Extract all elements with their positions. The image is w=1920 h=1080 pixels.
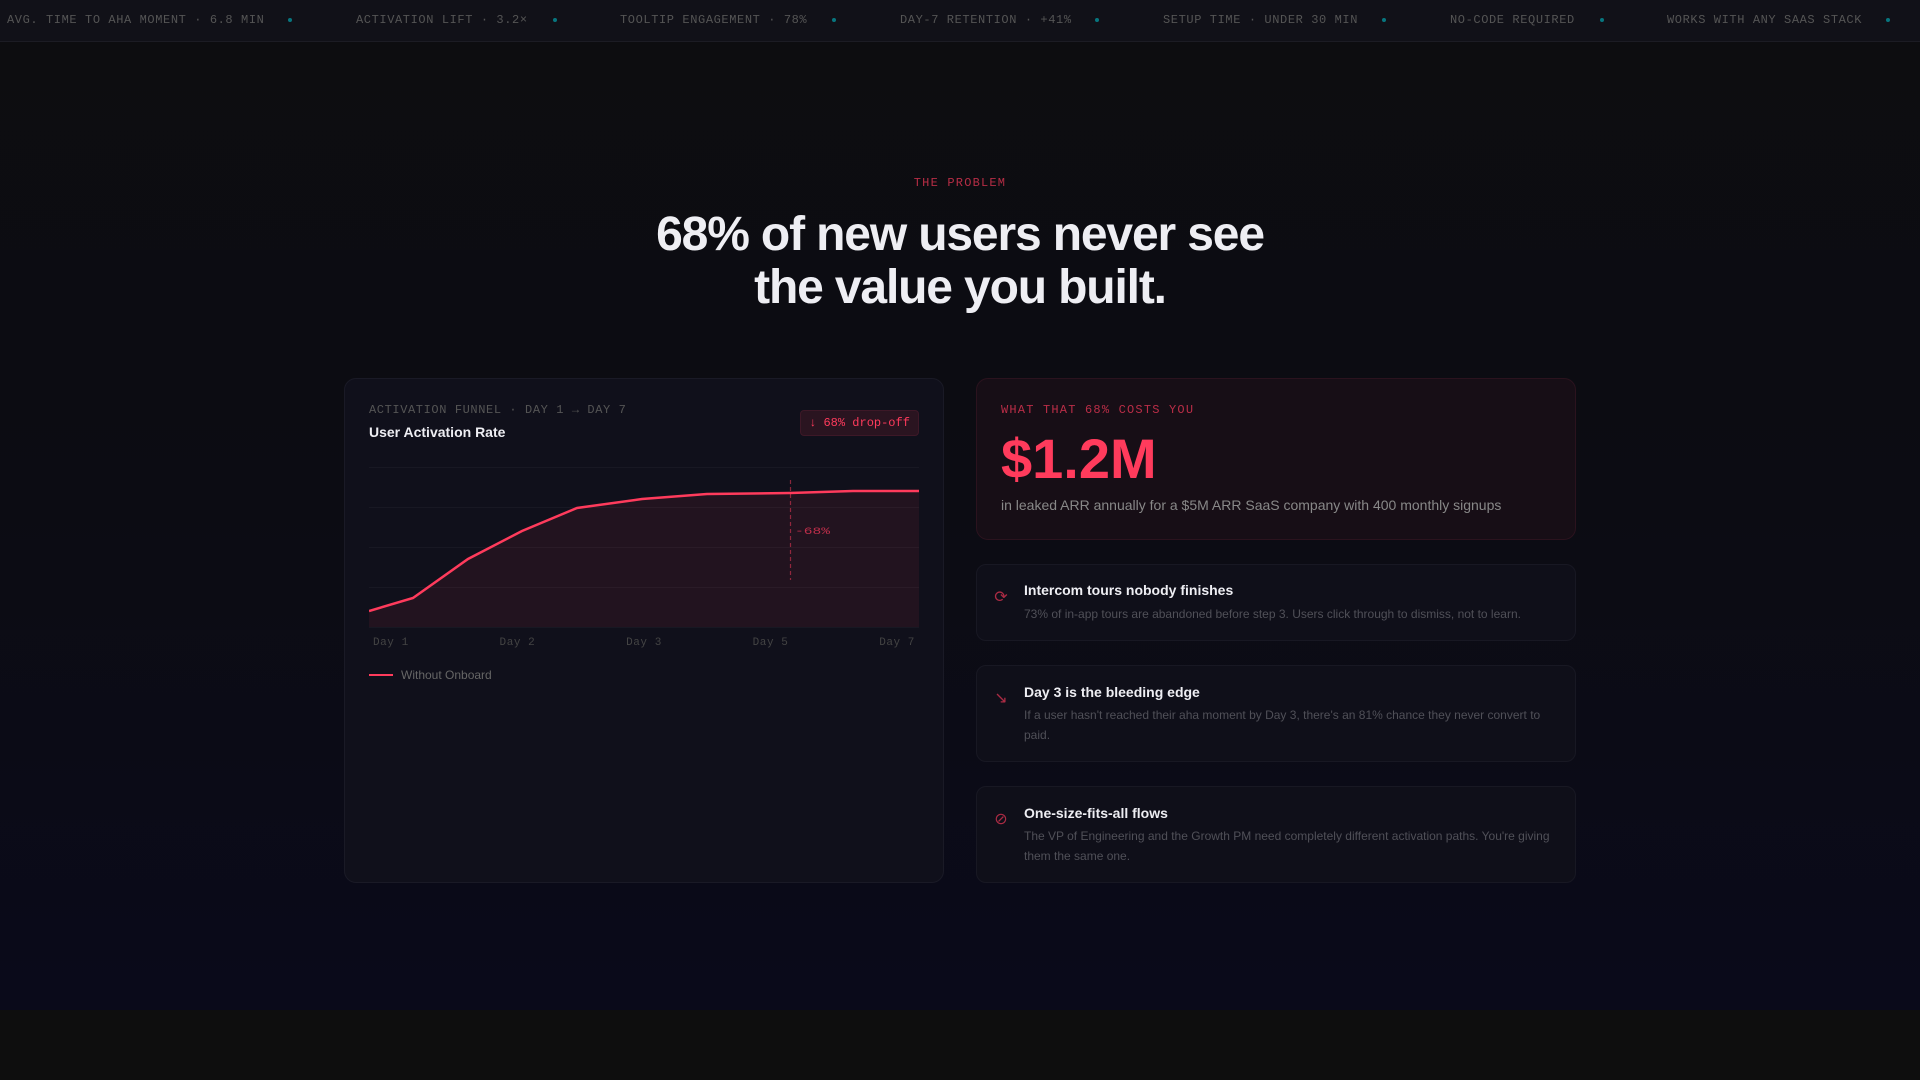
- cost value: $1.2M: [1001, 427, 1157, 490]
- chart x axis labels: Day 1: [373, 637, 409, 649]
- card text: The VP of Engineering and the Growth PM need completely different activation paths. You're giving them the same one.: [1024, 829, 1550, 863]
- panel: activation funnel chart: [344, 378, 944, 883]
- chart x axis labels: [373, 637, 915, 649]
- panel: cost of the 68%: [976, 378, 1576, 540]
- card: one-size-fits-all: [976, 786, 1576, 883]
- icon: down arrow: ↘: [994, 688, 1008, 707]
- eyebrow: the problem: THE PROBLEM: [914, 176, 1006, 190]
- cost description: in leaked ARR annually for a $5M ARR SaaS company with 400 monthly signups: [1001, 497, 1501, 513]
- card text: 73% of in-app tours are abandoned before step 3. Users click through to dismiss, not to learn.: [1024, 607, 1521, 621]
- chart label: ACTIVATION FUNNEL · DAY 1 → DAY 7: [369, 403, 626, 417]
- title: the value you built.: [754, 261, 1166, 314]
- icon: prohibited: ⊘: [994, 809, 1008, 828]
- ticker bar: SETUP TIME · UNDER 30 MIN: [1163, 13, 1358, 27]
- card title: Intercom tours nobody finishes: [1024, 582, 1233, 598]
- ticker bar: TOOLTIP ENGAGEMENT · 78%: [620, 13, 807, 27]
- chart x axis labels: Day 7: [879, 637, 915, 649]
- chart x axis labels: Day 5: [753, 637, 788, 649]
- card: intercom tours: [976, 564, 1576, 641]
- ticker bar: ACTIVATION LIFT · 3.2×: [356, 13, 528, 27]
- card text: If a user hasn't reached their aha moment by Day 3, there's an 81% chance they never convert to paid.: [1024, 708, 1540, 742]
- chart x axis labels: Day 2: [500, 637, 535, 649]
- drop-off marker: [790, 480, 792, 580]
- card title: Day 3 is the bleeding edge: [1024, 684, 1200, 700]
- title: [656, 208, 1264, 314]
- ticker bar: [0, 0, 1920, 42]
- title: 68% of new users never see: [656, 208, 1264, 261]
- card title: One-size-fits-all flows: [1024, 805, 1168, 821]
- chart title: User Activation Rate: [369, 424, 505, 440]
- badge: drop-off: [800, 410, 919, 436]
- area under curve: [369, 491, 919, 627]
- ticker bar: AVG. TIME TO AHA MOMENT · 6.8 MIN: [7, 13, 264, 27]
- badge: drop-off: ↓ 68% drop-off: [809, 416, 910, 430]
- ticker bar: WORKS WITH ANY SAAS STACK: [1667, 13, 1862, 27]
- ticker bar: NO-CODE REQUIRED: [1450, 13, 1575, 27]
- drop-off value: -68%: [795, 527, 830, 538]
- line chart: [369, 480, 919, 627]
- icon: cycle: ⟳: [994, 587, 1008, 606]
- legend: Without Onboard: [401, 668, 492, 682]
- cost label: WHAT THAT 68% COSTS YOU: [1001, 403, 1194, 417]
- card: day 3: [976, 665, 1576, 762]
- ticker bar: DAY-7 RETENTION · +41%: [900, 13, 1072, 27]
- chart x axis labels: Day 3: [626, 637, 662, 649]
- activation line: [369, 491, 919, 611]
